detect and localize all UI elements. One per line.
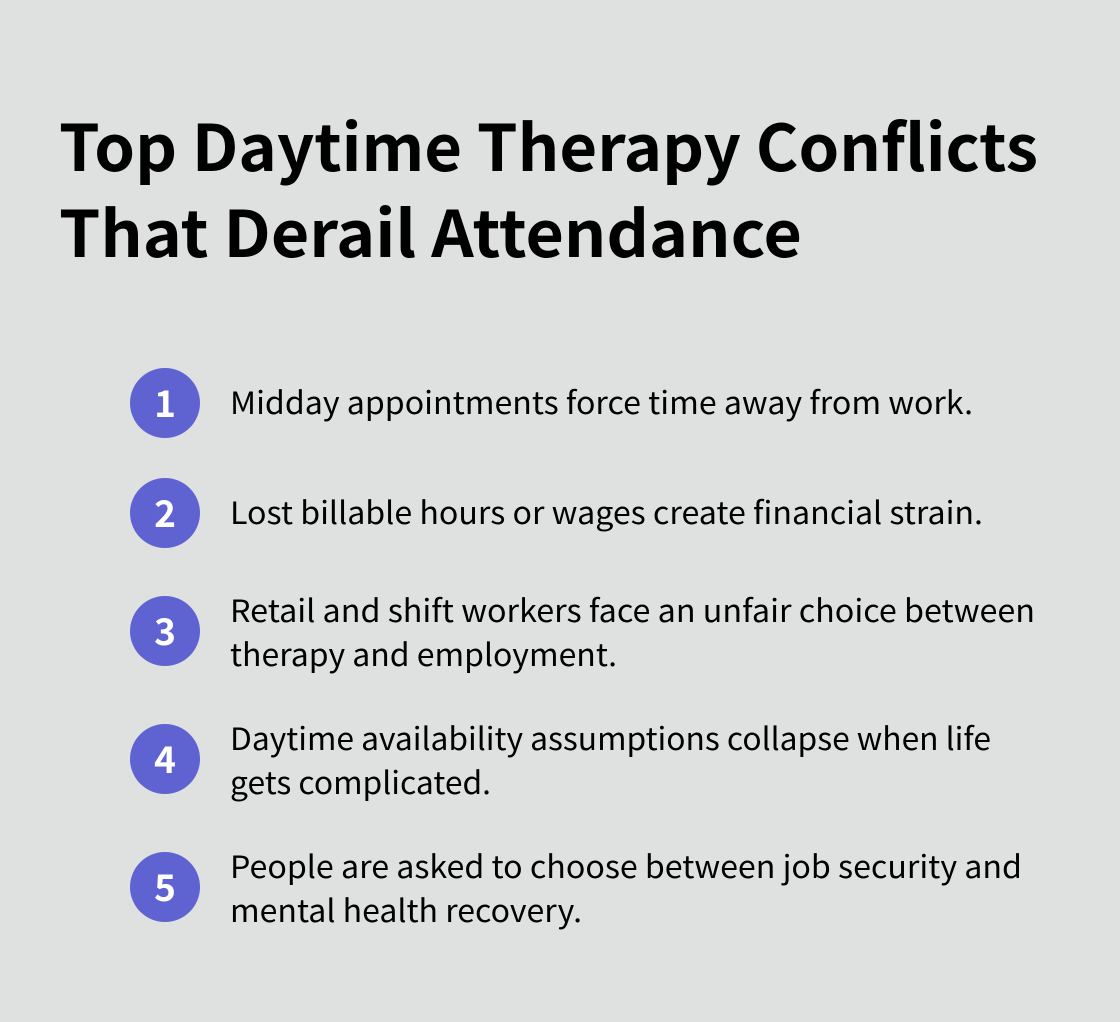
item 5 text: [230, 842, 1022, 931]
number badge 3: 3: [154, 602, 176, 656]
number badge 3: [130, 596, 200, 666]
item 3 text: therapy and employment.: [230, 630, 617, 675]
number badge 1: [130, 368, 200, 438]
list item 5: [130, 842, 1022, 931]
item 4 text: [230, 714, 991, 803]
item 3 text: Retail and shift workers face an unfair choice between: [230, 586, 1035, 631]
list item 4: [130, 714, 991, 803]
number badge 5: [130, 852, 200, 922]
title: [59, 98, 1038, 276]
list item 1: [130, 368, 973, 438]
item 5 text: People are asked to choose between job security and: [230, 842, 1022, 887]
title: That Derail Attendance: [59, 184, 802, 276]
number badge 2: [130, 478, 200, 548]
number badge 2: 2: [154, 484, 176, 538]
number badge 1: 1: [154, 374, 176, 428]
number badge 4: [130, 724, 200, 794]
number badge 4: 4: [154, 730, 176, 784]
number badge 5: 5: [154, 858, 176, 912]
item 3 text: [230, 586, 1035, 675]
list item 3: [130, 586, 1035, 675]
item 4 text: Daytime availability assumptions collapse when life: [230, 714, 991, 759]
title: Top Daytime Therapy Conflicts: [59, 98, 1038, 190]
item 2 text: Lost billable hours or wages create financial strain.: [230, 488, 983, 533]
list item 2: [130, 478, 983, 548]
item 5 text: mental health recovery.: [230, 886, 582, 931]
item 1 text: Midday appointments force time away from work.: [230, 378, 973, 423]
item 4 text: gets complicated.: [230, 758, 491, 803]
